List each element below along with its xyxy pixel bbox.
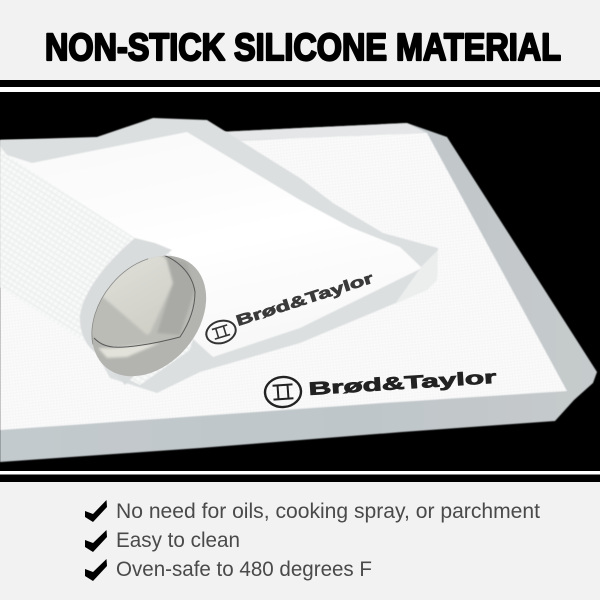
bottom mat xyxy=(0,123,597,462)
roll body xyxy=(0,146,205,385)
text: oven-safe: Oven-safe to 480 degrees F xyxy=(116,558,372,581)
logo: Brød & Taylor on bottom mat xyxy=(264,367,497,408)
feature list xyxy=(85,500,540,581)
mat edge thickness at lifted corner xyxy=(395,250,438,304)
logo: Brød & Taylor on bottom mat: Brød&Taylor xyxy=(308,367,497,399)
icon: check mark 1 xyxy=(85,500,107,522)
icon: check mark 2 xyxy=(85,530,107,552)
roll end band xyxy=(80,238,172,385)
icon: check mark 3 xyxy=(85,559,107,581)
photo panel: rolled silicone baking mats xyxy=(0,92,600,471)
roll opening xyxy=(91,256,206,376)
logo: Brød & Taylor on top mat: Brød&Taylor xyxy=(234,270,376,330)
logo: Brød & Taylor on top mat xyxy=(203,270,376,347)
header band xyxy=(0,0,600,80)
top mat lifted and rolled xyxy=(0,118,438,393)
text: no need for oils: No need for oils, cooking spray, or parchment xyxy=(116,500,540,523)
text: easy to clean: Easy to clean xyxy=(116,529,240,552)
